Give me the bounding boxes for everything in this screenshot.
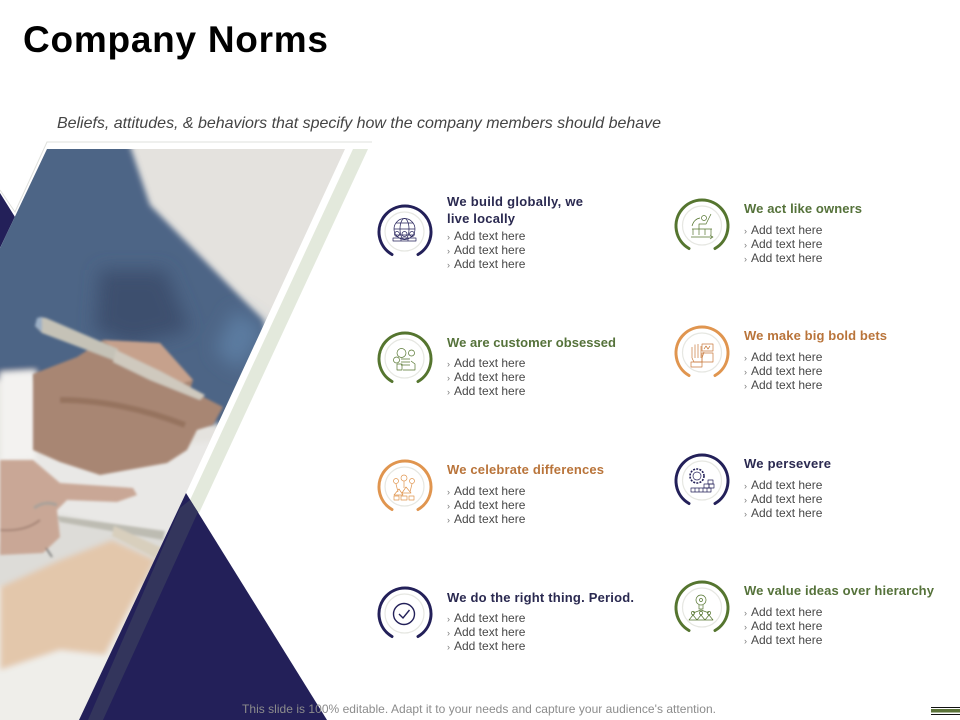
list: Add text here [454, 484, 526, 498]
list: Add text here [751, 364, 823, 378]
list: Add text here [454, 611, 526, 625]
icon: gear with bricks [676, 455, 728, 504]
item: We do the right thing [379, 588, 634, 653]
heading: We celebrate differences [447, 462, 604, 477]
list: › [744, 381, 747, 391]
list: › [447, 232, 450, 242]
list: › [744, 254, 747, 264]
item: We celebrate differences [379, 461, 604, 526]
list: Add text here [751, 633, 823, 647]
list: › [744, 608, 747, 618]
item: We act like owners [676, 200, 862, 265]
icon: people balloons [379, 461, 431, 510]
icon: lightbulb and team [676, 582, 728, 630]
list: Add text here [751, 350, 823, 364]
list: › [447, 359, 450, 369]
footer note: This slide is 100% editable. Adapt it to your needs and capture your audience's attention. [242, 702, 716, 716]
list: Add text here [751, 251, 823, 265]
list: › [447, 387, 450, 397]
list: Add text here [454, 229, 526, 243]
list [447, 611, 526, 653]
heading: We build globally, we [447, 194, 583, 209]
decorative outline: photo frame [0, 142, 372, 212]
green diagonal band [88, 149, 368, 720]
list: › [744, 622, 747, 632]
item: We are customer obsessed [379, 333, 616, 398]
list [744, 223, 823, 265]
list: Add text here [454, 384, 526, 398]
title: Company Norms [23, 19, 328, 60]
icon: globe with people [379, 206, 431, 254]
list: Add text here [454, 625, 526, 639]
list: › [447, 614, 450, 624]
heading: We value ideas over hierarchy [744, 583, 935, 598]
list: Add text here [454, 356, 526, 370]
list: Add text here [454, 498, 526, 512]
list: › [447, 260, 450, 270]
list: › [744, 481, 747, 491]
list: Add text here [751, 223, 823, 237]
list: Add text here [454, 257, 526, 271]
list [744, 350, 823, 392]
heading: We act like owners [744, 201, 862, 216]
heading: We make big bold bets [744, 328, 887, 343]
list: Add text here [454, 639, 526, 653]
list [447, 229, 526, 271]
list: › [744, 367, 747, 377]
navy triangle [79, 493, 327, 720]
list: Add text here [751, 492, 823, 506]
corner mark: green bar with black lines [931, 707, 960, 715]
icon: check circle [379, 588, 431, 636]
list: › [447, 246, 450, 256]
dark hand [33, 340, 223, 475]
heading: We do the right thing. Period. [447, 590, 634, 605]
list: Add text here [751, 506, 823, 520]
list: Add text here [751, 237, 823, 251]
list: › [744, 495, 747, 505]
item: We make big bold bets [676, 327, 887, 392]
list [447, 356, 526, 398]
list: Add text here [751, 478, 823, 492]
translucent band over triangle [88, 500, 198, 720]
list: › [744, 226, 747, 236]
list: › [447, 487, 450, 497]
list: › [744, 509, 747, 519]
list: › [744, 240, 747, 250]
item: We persevere [676, 455, 831, 520]
list: › [744, 353, 747, 363]
list: Add text here [751, 619, 823, 633]
heading: We persevere [744, 456, 831, 471]
list: Add text here [751, 605, 823, 619]
list: › [447, 642, 450, 652]
subtitle: Beliefs, attitudes, & behaviors that specify how the company members should behave [57, 115, 661, 132]
icon: hand with cards [676, 327, 728, 376]
book [57, 516, 165, 540]
list: › [447, 373, 450, 383]
icon: customer [379, 333, 431, 382]
corner triangle: navy left [0, 193, 15, 248]
list: › [447, 501, 450, 511]
icon: owner at podium [676, 200, 728, 248]
heading: We are customer obsessed [447, 335, 616, 350]
list: Add text here [454, 370, 526, 384]
item: We build globally [379, 194, 583, 271]
list: › [447, 515, 450, 525]
photo: businessperson hands with pen [0, 140, 350, 720]
item: We value ideas over hierarchy [676, 582, 935, 647]
pen [35, 317, 118, 361]
list: › [447, 628, 450, 638]
list [744, 478, 823, 520]
suit shading [95, 270, 265, 370]
list [744, 605, 823, 647]
list: Add text here [454, 243, 526, 257]
heading: live locally [447, 211, 516, 226]
list: › [744, 636, 747, 646]
list: Add text here [751, 378, 823, 392]
list [447, 484, 526, 526]
list: Add text here [454, 512, 526, 526]
pointing hand [0, 460, 137, 555]
